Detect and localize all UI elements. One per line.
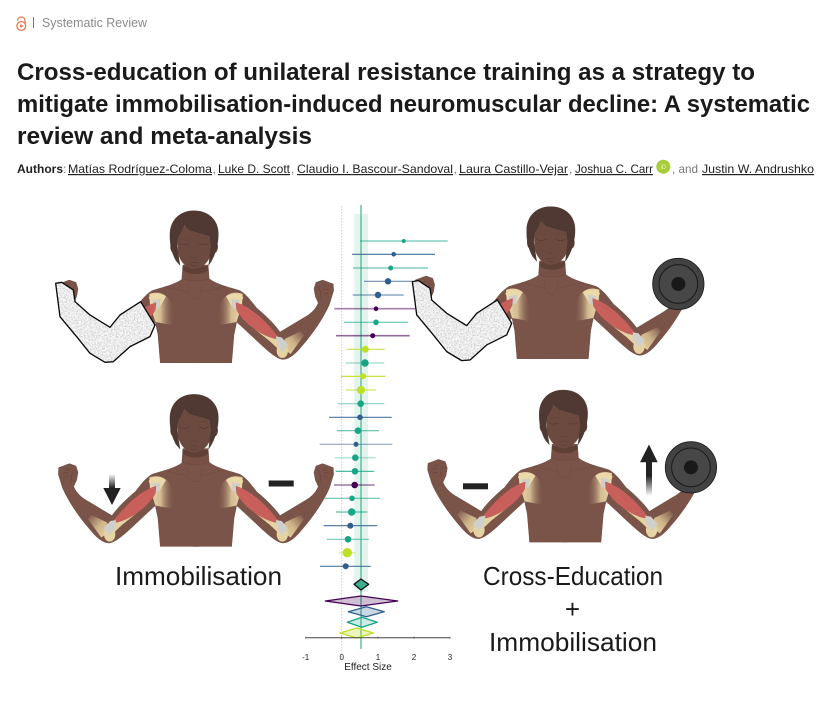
symbol: no change bbox=[269, 480, 294, 486]
arrow: increase bbox=[640, 444, 658, 496]
authors line: Justin W. Andrushko bbox=[702, 162, 814, 176]
icon: dumbbell bbox=[653, 258, 704, 310]
authors line bbox=[17, 160, 814, 176]
header: article type bbox=[17, 16, 148, 30]
confidence band bbox=[354, 214, 368, 592]
pooled effect line bbox=[360, 205, 362, 649]
figure: immobilised arm, untrained (top left) bbox=[56, 211, 334, 363]
title: review and meta-analysis bbox=[17, 123, 312, 150]
symbol: no change bbox=[463, 483, 488, 489]
label: Cross-Education + Immobilisation bbox=[483, 561, 663, 657]
authors line: Joshua C. Carr bbox=[575, 162, 653, 176]
authors line: Matías Rodríguez-Coloma bbox=[68, 162, 212, 176]
x axis: 1 bbox=[376, 653, 381, 662]
forest plot bbox=[302, 205, 453, 673]
study rows bbox=[320, 239, 448, 569]
title: mitigate immobilisation-induced neuromuscular decline: A systematic bbox=[17, 91, 810, 118]
zero reference line bbox=[341, 206, 343, 660]
figure: cross-education outcome (bottom right) bbox=[428, 390, 717, 542]
label: Immobilisation: Immobilisation bbox=[115, 561, 282, 591]
x axis: Effect Size bbox=[344, 662, 392, 673]
icon: ORCID: iD bbox=[660, 165, 667, 171]
authors line: Luke D. Scott bbox=[218, 162, 291, 176]
figure: immobilisation outcome (bottom left) bbox=[58, 394, 334, 547]
figure: immobilised arm, contralateral training with dumbbell (top right) bbox=[412, 207, 704, 361]
cast on left arm bbox=[412, 281, 512, 361]
x axis: 2 bbox=[412, 653, 417, 662]
x axis: 0 bbox=[339, 653, 344, 662]
authors line: , and bbox=[672, 162, 698, 176]
label: Cross-Education + Immobilisation: Cross-Education bbox=[483, 561, 663, 591]
authors line: , bbox=[454, 162, 457, 176]
label: Systematic Review: Systematic Review bbox=[42, 16, 148, 30]
x axis: 3 bbox=[448, 653, 453, 662]
icon: dumbbell bbox=[665, 442, 717, 493]
x axis bbox=[302, 636, 453, 673]
label: Cross-Education + Immobilisation: + bbox=[565, 594, 580, 624]
authors line: : bbox=[63, 162, 66, 176]
authors line: Claudio I. Bascour-Sandoval bbox=[297, 162, 453, 176]
arrow: decrease bbox=[103, 474, 121, 505]
authors line: Authors bbox=[17, 162, 63, 176]
authors line: Laura Castillo-Vejar bbox=[459, 162, 568, 176]
icon: ORCID bbox=[656, 160, 670, 174]
label: Cross-Education + Immobilisation: Immobilisation bbox=[489, 627, 657, 657]
authors line: , bbox=[212, 162, 216, 176]
cast on left arm bbox=[56, 282, 155, 362]
icon: open access bbox=[17, 17, 26, 30]
authors line: , bbox=[291, 162, 294, 176]
summary diamonds bbox=[325, 579, 398, 638]
x axis: -1 bbox=[302, 653, 310, 662]
title: Cross-education of unilateral resistance training as a strategy to bbox=[17, 59, 755, 86]
separator bar bbox=[33, 17, 34, 28]
title bbox=[17, 59, 810, 150]
authors line: , bbox=[569, 162, 572, 176]
